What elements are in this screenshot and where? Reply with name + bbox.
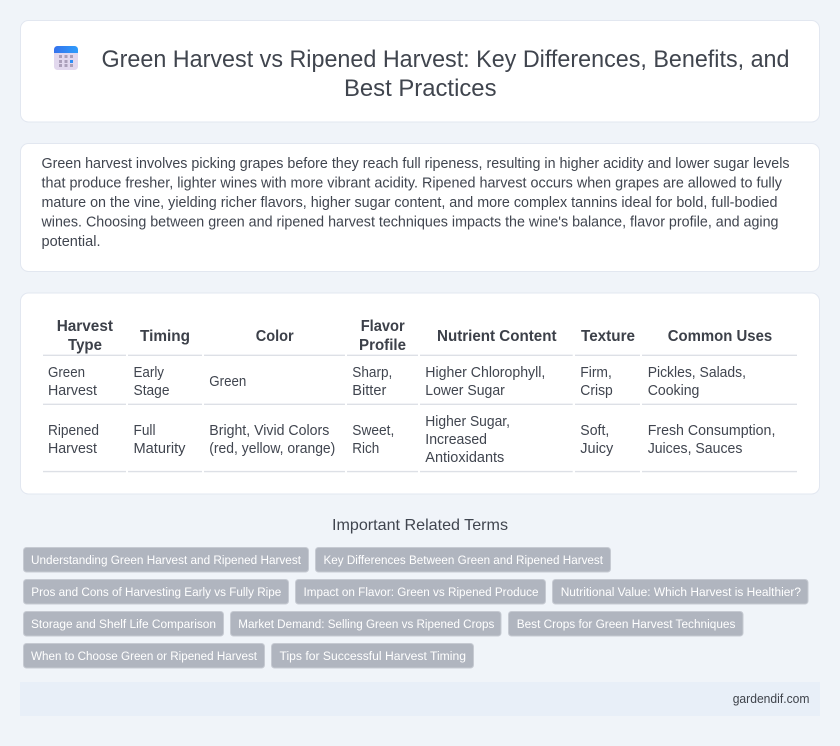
icon: calendar bbox=[54, 46, 78, 70]
related terms chips: Impact on Flavor: Green vs Ripened Produce bbox=[304, 585, 539, 599]
intro paragraph: that produce fresher, lighter wines with more vibrant acidity. Ripened harvest occurs when grapes are allowed to fully bbox=[42, 176, 783, 192]
table row: ripened harvest bbox=[48, 414, 775, 466]
related terms chips: Pros and Cons of Harvesting Early vs Fully Ripe bbox=[31, 585, 281, 599]
table header row: Profile bbox=[359, 337, 406, 354]
table row: ripened harvest: Harvest bbox=[48, 441, 97, 457]
table rule lines bbox=[43, 355, 797, 472]
table row: ripened harvest: Ripened bbox=[48, 423, 99, 439]
table row: ripened harvest: Full bbox=[134, 423, 156, 439]
table row: green harvest: Higher Chlorophyll, bbox=[425, 365, 545, 381]
table header row: Color bbox=[256, 328, 294, 345]
related terms chips: Key Differences Between Green and Ripened Harvest bbox=[324, 553, 604, 567]
table row: green harvest: Early bbox=[134, 365, 165, 381]
related terms chips: Understanding Green Harvest and Ripened Harvest bbox=[31, 553, 302, 567]
table row: ripened harvest: Higher Sugar, bbox=[425, 414, 510, 430]
panel: comparison table bbox=[20, 293, 820, 494]
table row: ripened harvest: Bright, Vivid Colors bbox=[209, 423, 329, 439]
table row: green harvest: Firm, bbox=[580, 365, 612, 381]
table row: ripened harvest: Sweet, bbox=[352, 423, 394, 439]
table row: green harvest: Harvest bbox=[48, 383, 97, 399]
table row: green harvest: Green bbox=[209, 374, 246, 390]
table header row bbox=[57, 318, 773, 354]
table header row: Timing bbox=[140, 328, 190, 345]
related terms chips: Nutritional Value: Which Harvest is Healthier? bbox=[561, 585, 801, 599]
table row: green harvest: Sharp, bbox=[352, 365, 392, 381]
table header row: Type bbox=[68, 337, 102, 354]
intro paragraph: mature on the vine, yielding richer flavors, higher sugar content, and more complex tannins ideal for bold, full-bodied bbox=[42, 195, 778, 211]
intro paragraph: wines. Choosing between green and ripened harvest techniques impacts the wine's balance, flavor profile, and aging bbox=[41, 214, 779, 230]
table row: ripened harvest: Antioxidants bbox=[425, 450, 504, 466]
table row: ripened harvest: Rich bbox=[352, 441, 379, 457]
table row: ripened harvest: Juices, Sauces bbox=[648, 441, 742, 457]
table row: green harvest: Stage bbox=[134, 383, 170, 399]
table row: green harvest: Bitter bbox=[352, 383, 387, 399]
footer source text: gardendif.com bbox=[733, 692, 810, 706]
intro paragraph bbox=[41, 156, 790, 250]
intro paragraph: Green harvest involves picking grapes before they reach full ripeness, resulting in higher acidity and lower sugar levels bbox=[42, 156, 790, 172]
table row: ripened harvest: Increased bbox=[425, 432, 487, 448]
table row: green harvest: Pickles, Salads, bbox=[648, 365, 746, 381]
table row: green harvest bbox=[48, 365, 746, 399]
related terms chips: Best Crops for Green Harvest Techniques bbox=[517, 617, 735, 631]
related terms chips bbox=[24, 548, 808, 668]
table header row: Texture bbox=[581, 328, 635, 345]
table row: green harvest: Cooking bbox=[648, 383, 699, 399]
title: Green Harvest vs Ripened Harvest: Key Differences, Benefits, and bbox=[102, 46, 790, 73]
table header row: Nutrient Content bbox=[437, 328, 556, 345]
related terms chips: Storage and Shelf Life Comparison bbox=[31, 617, 216, 631]
related terms chips: When to Choose Green or Ripened Harvest bbox=[31, 649, 258, 663]
table row: green harvest: Green bbox=[48, 365, 85, 381]
table header row: Flavor bbox=[361, 318, 405, 335]
title bbox=[102, 46, 790, 102]
title: Best Practices bbox=[344, 75, 496, 102]
footer bar bbox=[20, 682, 820, 716]
table header row: Common Uses bbox=[668, 328, 773, 345]
panel: title header bbox=[20, 20, 820, 122]
related terms heading: Important Related Terms bbox=[332, 517, 508, 534]
intro paragraph: potential. bbox=[42, 234, 100, 250]
table row: ripened harvest: Juicy bbox=[580, 441, 614, 457]
table row: ripened harvest: Maturity bbox=[134, 441, 186, 457]
table row: green harvest: Crisp bbox=[580, 383, 613, 399]
table row: green harvest: Lower Sugar bbox=[425, 383, 505, 399]
related terms chips: Market Demand: Selling Green vs Ripened Crops bbox=[238, 617, 494, 631]
table row: ripened harvest: Soft, bbox=[580, 423, 609, 439]
table row: ripened harvest: Fresh Consumption, bbox=[648, 423, 775, 439]
related terms chips: Tips for Successful Harvest Timing bbox=[280, 649, 466, 663]
table row: ripened harvest: (red, yellow, orange) bbox=[209, 441, 335, 457]
panel: introduction bbox=[20, 144, 820, 272]
table header row: Harvest bbox=[57, 318, 113, 335]
